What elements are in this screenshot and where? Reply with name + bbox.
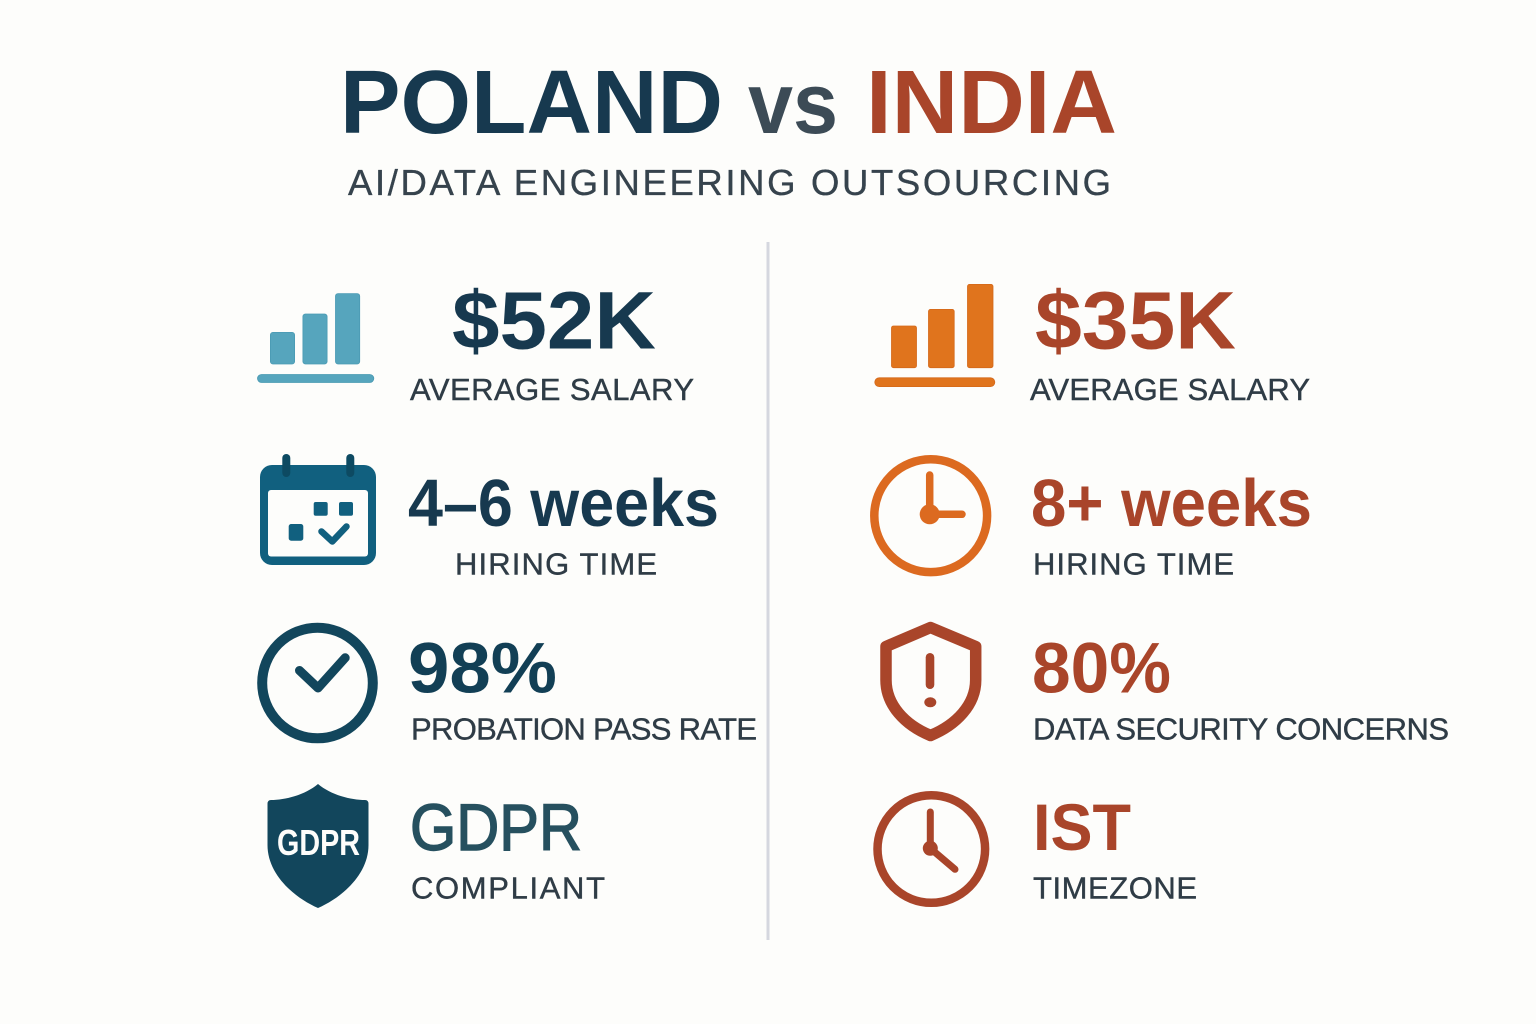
value: IST: IST [1033,790,1131,864]
divider [766,242,770,940]
value: 4-6 weeks: 4–6 weeks [408,466,719,541]
icon: GDPR shield: GDPR [277,822,360,863]
subtitle: AI/DATA ENGINEERING OUTSOURCING [348,162,1111,203]
metric: Poland probation pass rate [262,628,757,747]
metric: Poland average salary [258,276,694,407]
label: timezone: TIMEZONE [1033,871,1197,906]
label: data security concerns: DATA SECURITY CONCERNS [1033,712,1449,747]
value: $52K: $52K [452,276,656,366]
metric: Poland GDPR [268,784,605,908]
label: probation pass rate: PROBATION PASS RATE [411,712,757,747]
value: GDPR: GDPR [410,790,582,864]
label: hiring time: HIRING TIME [455,546,657,581]
label: average salary: AVERAGE SALARY [1030,372,1310,407]
title [340,53,1117,153]
metric: India hiring time [874,459,1312,581]
value: 98%: 98% [408,630,557,709]
panel: India [874,276,1449,906]
value: $35K: $35K [1035,276,1236,366]
metric: India average salary [875,276,1310,407]
icon: GDPR shield [268,784,368,908]
value: 8+ weeks: 8+ weeks [1031,466,1312,541]
label: hiring time: HIRING TIME [1033,546,1234,581]
label: average salary: AVERAGE SALARY [410,372,694,407]
title: POLAND [340,53,723,153]
title: vs [748,56,838,152]
metric: Poland hiring time [260,454,719,581]
icon: warning shield [886,628,976,736]
panel: Poland [258,276,757,908]
icon: orange clock [874,459,987,572]
icon: calendar with check [260,454,376,565]
icon: rust clock [878,795,985,903]
title: INDIA [866,53,1117,153]
icon: teal bar chart [258,294,374,382]
metric: India data security concerns [886,628,1449,747]
value: 80%: 80% [1032,630,1171,709]
icon: orange bar chart [875,284,995,387]
label: compliant: COMPLIANT [411,871,605,906]
icon: check clock [262,628,373,738]
metric: India timezone [878,790,1197,906]
